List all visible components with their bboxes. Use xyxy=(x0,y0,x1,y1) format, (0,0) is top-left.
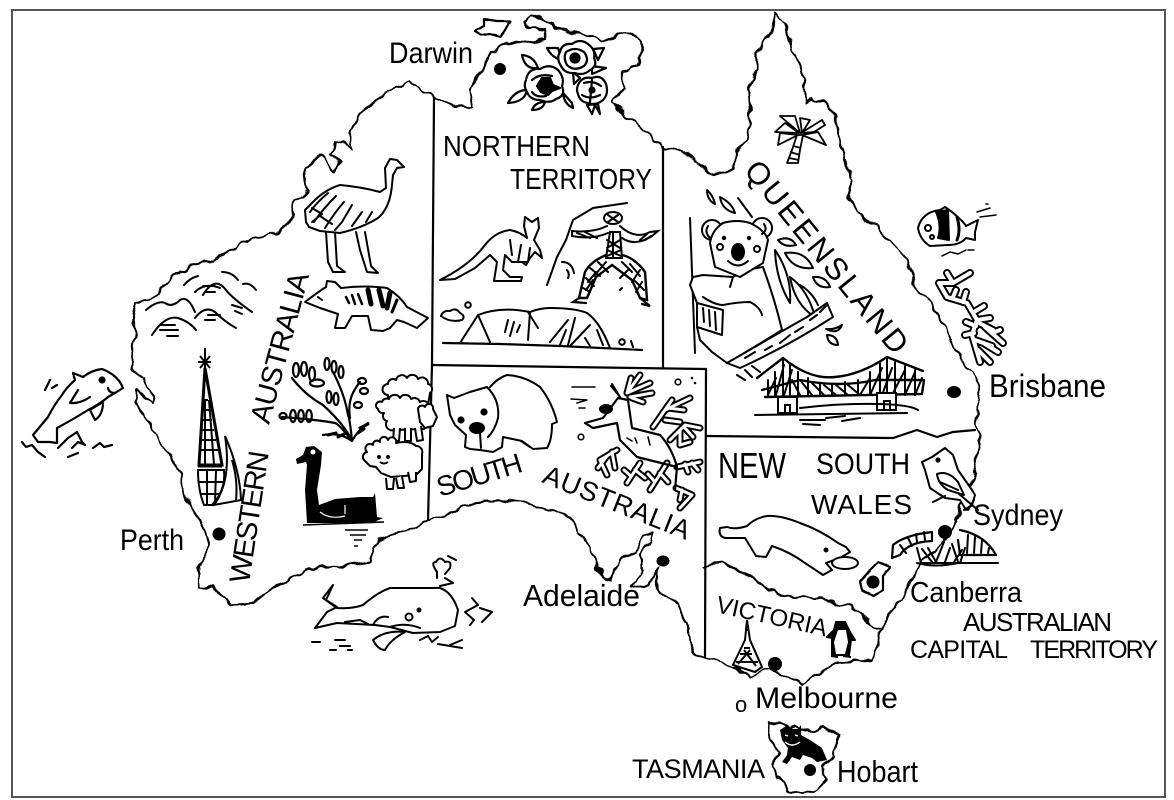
mainland coastline xyxy=(132,15,980,683)
city and state labels: AUSTRALIA xyxy=(539,460,695,546)
koala body xyxy=(690,267,782,363)
icon: flowers xyxy=(508,41,607,114)
icon: penguin xyxy=(827,622,855,657)
city and state labels: Hobart xyxy=(837,754,918,789)
city and state labels: Adelaide xyxy=(523,578,640,613)
city and state labels: CAPITAL xyxy=(910,636,1008,664)
icon: black swan xyxy=(296,446,384,546)
icon: whale xyxy=(312,556,492,650)
city dots xyxy=(212,63,961,776)
icon: Tasmanian devil xyxy=(780,725,827,764)
city and state labels: TERRITORY xyxy=(510,164,652,196)
city and state labels: Brisbane xyxy=(989,368,1106,404)
icon: hills xyxy=(146,272,256,336)
city and state labels: WESTERN xyxy=(224,449,276,585)
city and state labels: NEW xyxy=(718,445,786,486)
icon: numbat xyxy=(305,281,428,331)
city and state labels: Canberra xyxy=(910,577,1023,609)
icon: dolphin xyxy=(22,369,123,457)
Australian Capital Territory outline xyxy=(860,562,890,596)
state borders xyxy=(428,98,975,657)
icon: wombat xyxy=(447,375,557,452)
city and state labels: SOUTH xyxy=(433,447,526,503)
city and state labels: WALES xyxy=(811,489,912,520)
icon: leafy sea dragon xyxy=(571,375,700,508)
icon: platypus xyxy=(720,516,858,575)
city and state labels: Melbourne xyxy=(755,682,898,715)
icon: lorikeet bird xyxy=(922,448,978,510)
icon: tower in Victoria xyxy=(733,620,762,672)
city and state labels: QUEENSLAND xyxy=(738,153,916,361)
icon: aboriginal rock art figure xyxy=(547,203,658,306)
city and state labels: Darwin xyxy=(389,37,473,70)
city and state labels: TASMANIA xyxy=(632,754,765,784)
city and state labels: Perth xyxy=(120,524,184,557)
city and state labels: SOUTH xyxy=(816,448,910,481)
city and state labels: AUSTRALIA xyxy=(245,268,316,427)
icon: koala on a branch xyxy=(690,190,842,380)
icon: Story Bridge xyxy=(755,357,924,425)
eucalyptus branch xyxy=(727,303,833,368)
city and state labels: VICTORIA xyxy=(714,591,830,642)
city and state labels: o xyxy=(735,692,747,717)
icon: kangaroo xyxy=(440,217,542,281)
icon: clownfish xyxy=(918,204,996,256)
map of Australia outline xyxy=(132,15,980,795)
Tasmania island xyxy=(767,722,838,795)
koala head xyxy=(702,220,722,240)
city and state labels: AUSTRALIAN xyxy=(963,607,1112,637)
icon: coral reef xyxy=(939,273,1003,362)
icon: Uluru xyxy=(441,302,642,350)
icon: sheep xyxy=(363,375,437,489)
icon: wildflower plant xyxy=(280,358,368,441)
icon: transmission tower and sail xyxy=(198,348,241,505)
icon: palm tree xyxy=(775,116,826,163)
icon: emu xyxy=(305,159,404,273)
icon: Sydney Harbour Bridge and Opera House xyxy=(892,530,998,566)
city and state labels: NORTHERN xyxy=(443,131,590,163)
Melville island xyxy=(475,19,510,37)
city and state labels: Sydney xyxy=(973,499,1063,532)
eucalyptus leaves xyxy=(707,190,830,287)
city and state labels: TERRITORY xyxy=(1030,636,1158,664)
